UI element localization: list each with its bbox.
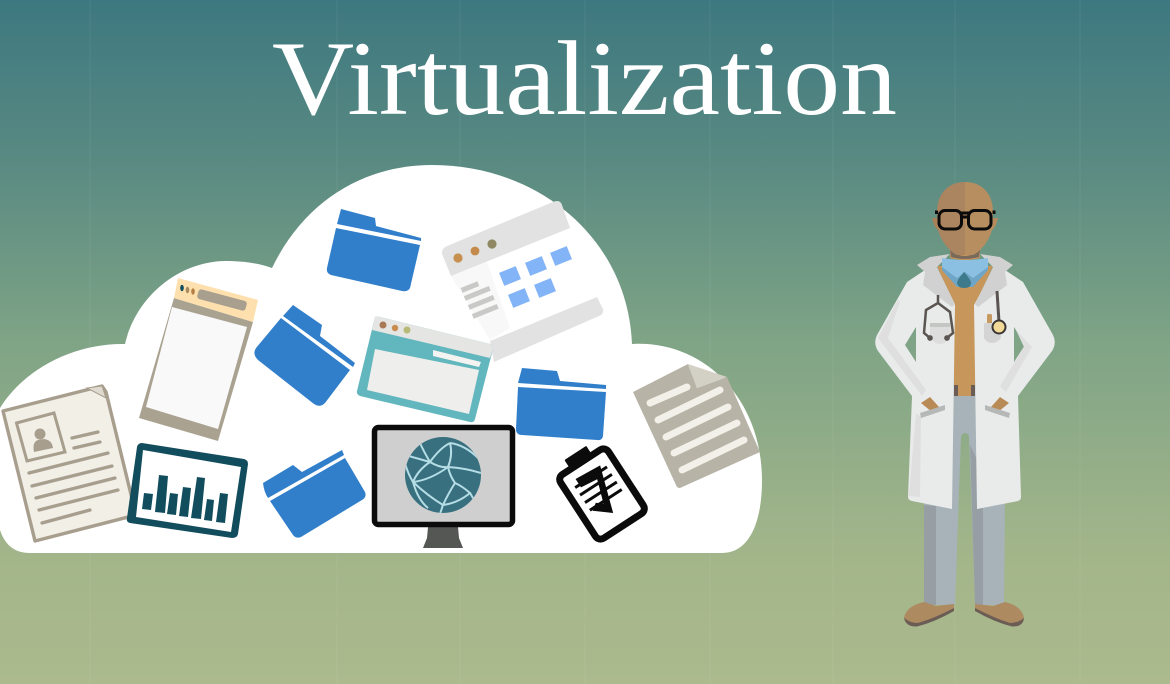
icon: folder right <box>516 368 606 440</box>
white lab coat <box>875 270 1055 509</box>
cloud with documents <box>0 165 762 553</box>
glasses <box>936 210 994 229</box>
trousers <box>924 385 1005 605</box>
cloud shape <box>0 165 762 553</box>
pockets and pen <box>930 314 1001 344</box>
doctor figure <box>875 182 1055 627</box>
coat shading <box>878 300 1032 497</box>
icon: grey document <box>633 364 760 488</box>
belt <box>954 385 975 396</box>
icon: grey application window <box>442 201 603 362</box>
icon: teal browser window <box>357 316 493 422</box>
icon: clipboard with check <box>551 437 647 541</box>
hands and coat pockets <box>920 397 1010 418</box>
shoes <box>904 602 1024 627</box>
title: Virtualization <box>272 20 897 137</box>
sweater <box>937 266 993 388</box>
head <box>932 182 998 260</box>
icon: resume document <box>3 386 136 541</box>
icon: tall browser window <box>139 278 258 441</box>
icon: monitor with globe <box>374 428 512 548</box>
lapels <box>917 254 1013 307</box>
icon: folder tilted <box>254 305 355 406</box>
icon: bar chart tablet <box>127 443 248 538</box>
stethoscope <box>924 291 1006 340</box>
icon: folder bottom <box>263 450 366 538</box>
shirt collar and tie <box>942 258 988 288</box>
icon: folder top <box>327 209 421 291</box>
